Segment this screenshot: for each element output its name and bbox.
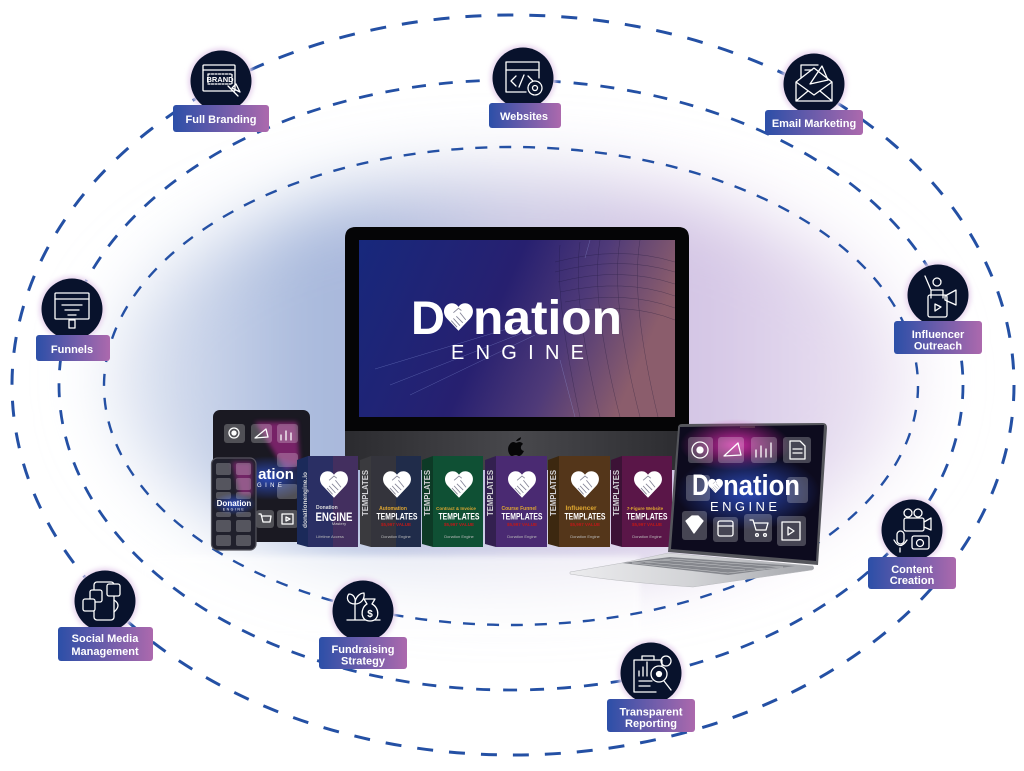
icon: envelope and megaphone <box>796 65 832 101</box>
screen grid pattern <box>555 240 675 417</box>
box: Donation Engine Mastery <box>297 456 358 547</box>
box: Course Funnel Templates: Course Funnel <box>501 506 537 512</box>
label: Full Branding <box>186 114 256 126</box>
box: Contract & Invoice Templates: TEMPLATES <box>423 469 432 516</box>
icon: phone with reactions <box>83 582 120 620</box>
logo: Donation Engine: nation <box>473 292 622 345</box>
phone: Donation <box>217 499 251 508</box>
monitor <box>345 227 689 470</box>
box: Course Funnel Templates: TEMPLATES <box>486 469 495 516</box>
node: Funnels <box>36 276 110 361</box>
box: Course Funnel Templates: Donation Engine <box>507 534 538 539</box>
box: Donation Engine Mastery: donationengine.io <box>302 472 309 528</box>
logo: Donation Engine <box>411 291 622 364</box>
box: 7-Figure Website Templates: $5,997 VALUE <box>632 522 662 527</box>
label <box>58 627 153 661</box>
label: Websites <box>500 111 548 123</box>
tablet <box>213 410 310 542</box>
label <box>894 321 982 354</box>
box: 7-Figure Website Templates: 7-Figure Website <box>627 506 664 511</box>
phone: ENGINE <box>223 508 245 512</box>
box: Influencer Templates: $5,997 VALUE <box>570 522 600 527</box>
laptop base <box>570 553 814 587</box>
logo: Donation Engine: D <box>411 291 445 344</box>
box: Donation Engine Mastery: Lifetime Access <box>316 534 344 539</box>
tablet: GINE <box>257 483 285 489</box>
box: Course Funnel Templates <box>485 456 547 547</box>
label: Creation <box>890 575 935 587</box>
label: Email Marketing <box>772 118 856 130</box>
node: Social Media Management <box>58 568 153 661</box>
box: Automation Templates: Automation <box>379 506 407 512</box>
label <box>319 637 407 669</box>
icon: camera, mic <box>894 509 931 552</box>
node: Websites <box>489 45 561 128</box>
box: 7-Figure Website Templates <box>611 456 672 547</box>
box: 7-Figure Website Templates: TEMPLATES <box>626 512 668 522</box>
box: Influencer Templates: Influencer <box>565 505 597 512</box>
box: Automation Templates: Donation Engine <box>381 534 412 539</box>
label: Fundraising <box>332 644 394 656</box>
icon: funnel window <box>55 293 89 328</box>
box: Donation Engine Mastery: ENGINE <box>316 510 352 524</box>
node: Full Branding <box>173 48 269 132</box>
box: Donation Engine Mastery: Mastery <box>332 521 346 526</box>
inner ring <box>104 147 918 625</box>
box: Course Funnel Templates: TEMPLATES <box>502 512 542 522</box>
label <box>868 557 956 589</box>
box: 7-Figure Website Templates: TEMPLATES <box>612 469 621 516</box>
box: Automation Templates: $5,997 VALUE <box>381 522 411 527</box>
laptop tiles <box>682 437 811 546</box>
tablet tiles <box>224 424 298 528</box>
middle ring <box>59 80 963 690</box>
box: Contract & Invoice Templates: Donation Engine <box>444 534 475 539</box>
node: Content Creation <box>868 497 956 589</box>
box: Course Funnel Templates: $5,997 VALUE <box>507 522 537 527</box>
box: Influencer Templates: Donation Engine <box>570 534 601 539</box>
icon: plant and money bag: $ <box>367 609 373 620</box>
monitor chin <box>345 425 689 470</box>
laptop logo: ENGINE <box>710 499 777 514</box>
phone tiles <box>216 463 251 546</box>
node: Influencer Outreach <box>894 262 982 354</box>
label: Management <box>71 646 139 658</box>
icon: clipboard and magnifier <box>634 656 671 692</box>
label <box>607 699 695 732</box>
box: Contract & Invoice Templates: $5,997 VALUE <box>444 522 474 527</box>
box: Contract & Invoice Templates: TEMPLATES <box>438 512 480 522</box>
phone <box>212 458 256 550</box>
box: Donation Engine Mastery: Donation <box>316 505 338 511</box>
apple logo <box>508 437 524 456</box>
monitor bezel <box>345 227 689 431</box>
laptop logo: D <box>692 469 709 502</box>
box: Influencer Templates: TEMPLATES <box>564 512 606 522</box>
label: Influencer <box>912 329 965 341</box>
product boxes <box>297 456 672 547</box>
label: Funnels <box>51 344 93 356</box>
icon: brand window: BRAND <box>206 75 234 84</box>
laptop lid <box>668 423 827 565</box>
box: 7-Figure Website Templates: Donation Engine <box>632 534 663 539</box>
box: Contract & Invoice Templates <box>422 456 483 547</box>
tablet: ation <box>258 466 294 483</box>
box: Automation Templates: TEMPLATES <box>361 469 370 516</box>
box: Contract & Invoice Templates: Contract & Invoice <box>436 506 476 511</box>
box: Influencer Templates: TEMPLATES <box>549 469 558 516</box>
label: Outreach <box>914 340 962 352</box>
phone and device shadow <box>150 544 212 546</box>
label: Social Media <box>72 633 139 645</box>
background glow <box>112 178 912 636</box>
laptop logo <box>692 469 800 514</box>
laptop tile icons <box>686 441 805 540</box>
logo: Donation Engine: ENGINE <box>451 342 584 364</box>
node: Fundraising Strategy <box>319 578 407 669</box>
node: Email Marketing <box>765 51 863 135</box>
laptop <box>150 419 827 587</box>
box: Automation Templates: TEMPLATES <box>376 512 418 522</box>
box: Automation Templates <box>360 456 421 547</box>
node: Transparent Reporting <box>607 640 695 732</box>
tablet tile icons <box>229 428 293 524</box>
box: Influencer Templates <box>548 456 610 547</box>
monitor screen <box>359 240 675 417</box>
icon: influencer phone <box>925 276 956 317</box>
label: Strategy <box>341 656 386 668</box>
label: Transparent <box>620 706 683 718</box>
icon: code window and gear <box>506 62 542 95</box>
keyboard <box>622 557 795 575</box>
label: Reporting <box>625 718 677 730</box>
laptop logo: nation <box>723 470 800 502</box>
label: Content <box>891 564 933 576</box>
